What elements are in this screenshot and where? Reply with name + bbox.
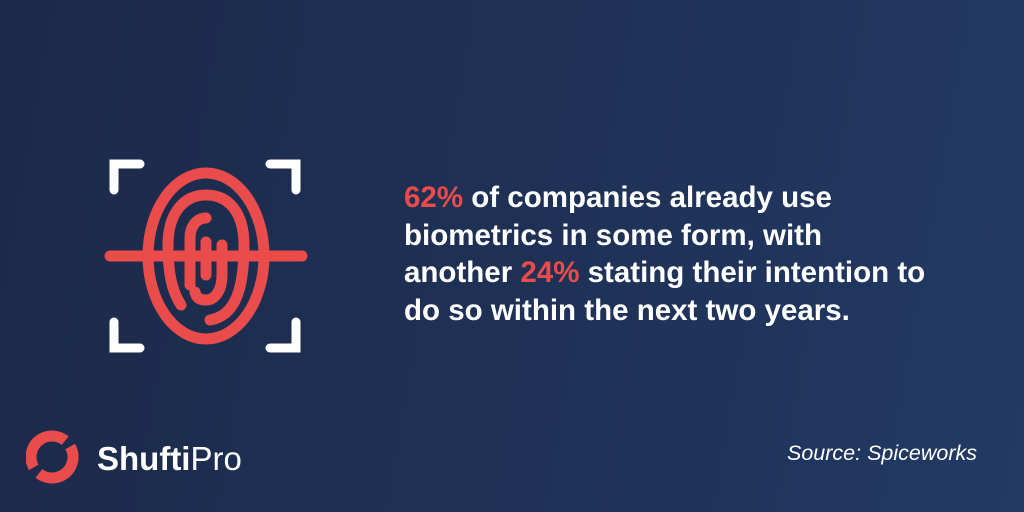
statistic text: 62% of companies already use (404, 181, 832, 214)
fingerprint (110, 173, 302, 339)
logo: ShuftiPro: ShuftiPro (97, 440, 242, 477)
statistic text (404, 181, 925, 326)
logo: ShuftiPro (26, 430, 242, 484)
statistic text: do so within the next two years. (404, 294, 850, 326)
brackets (114, 164, 296, 348)
statistic text: biometrics in some form, with (404, 218, 822, 252)
icon: fingerprint scanner (104, 160, 308, 352)
statistic text: another 24% stating their intention to (404, 256, 925, 289)
source: Source: Spiceworks (787, 441, 977, 465)
